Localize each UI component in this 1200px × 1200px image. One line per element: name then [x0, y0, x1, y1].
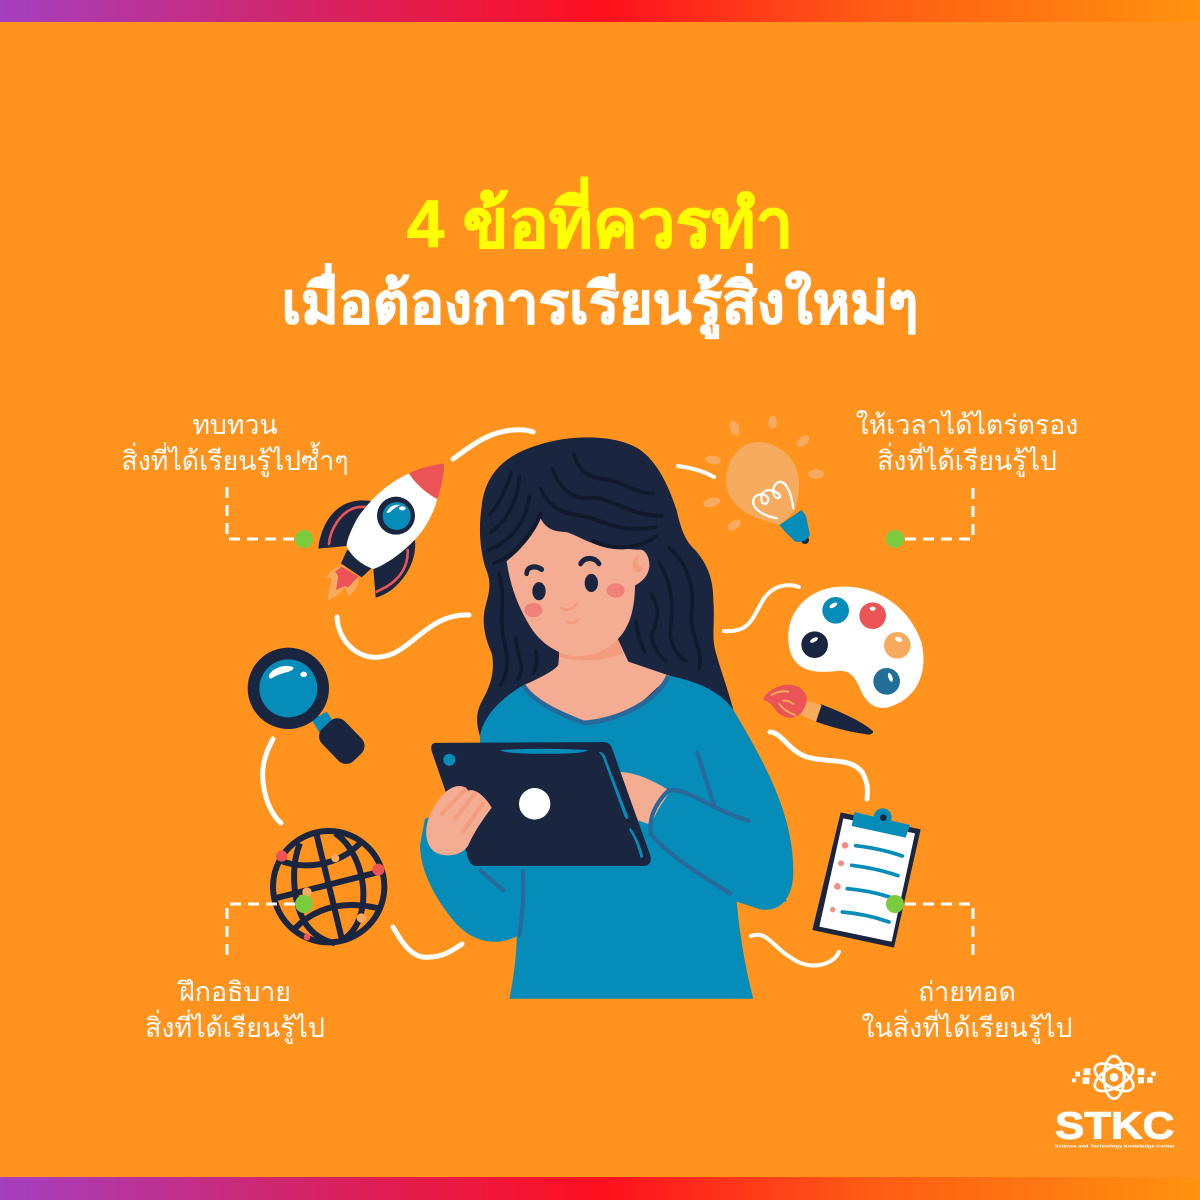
label: review repeatedly — [121, 410, 349, 477]
label: practise explaining — [145, 977, 325, 1044]
icon: rocket — [318, 463, 444, 601]
hair strands — [488, 455, 700, 685]
hair — [477, 437, 733, 759]
connector: bottom right — [905, 904, 973, 958]
top gradient bar — [0, 0, 1200, 22]
eyes — [532, 582, 546, 600]
title: เมื่อต้องการเรียนรู้สิ่งใหม่ๆ — [282, 263, 918, 339]
label: pass on: ในสิ่งที่ได้เรียนรู้ไป — [862, 1009, 1072, 1044]
face — [507, 519, 649, 656]
title — [282, 176, 918, 339]
icon: paint palette — [788, 587, 923, 708]
label: practise explaining: ฝึกอธิบาย — [177, 977, 291, 1007]
label: review repeatedly: สิ่งที่ได้เรียนรู้ไปซ้ำๆ — [121, 442, 349, 477]
icon: globe — [273, 831, 384, 943]
illustration: woman with tablet — [420, 437, 793, 999]
tablet details — [443, 754, 455, 766]
icon: paint brush — [763, 685, 873, 735]
label: practise explaining: สิ่งที่ได้เรียนรู้ไป — [145, 1009, 325, 1044]
neckline — [523, 676, 668, 723]
logo: STKC: STKC — [1055, 1105, 1174, 1147]
label: pass on: ถ่ายทอด — [918, 977, 1016, 1007]
ear detail — [633, 555, 643, 572]
neck and chest — [523, 636, 670, 723]
icon: light bulb — [702, 416, 824, 544]
connector: top left — [227, 487, 295, 539]
shirt — [420, 676, 793, 999]
logo: STKC — [1055, 1056, 1175, 1150]
motion swooshes — [263, 430, 867, 965]
label: pass on — [862, 977, 1072, 1044]
neck shadow — [559, 638, 623, 660]
title: 4 ข้อที่ควรทำ — [407, 176, 793, 262]
icon: magnifying glass — [248, 648, 369, 768]
icon: clipboard — [812, 808, 921, 948]
eyebrows — [527, 559, 599, 574]
nose and mouth — [562, 604, 578, 623]
label: time to reflect: ให้เวลาได้ไตร่ตรอง — [856, 409, 1078, 440]
bottom gradient bar — [0, 1177, 1200, 1200]
connector: top right — [905, 487, 973, 539]
label: time to reflect — [856, 409, 1078, 477]
logo: STKC: Science and Technology Knowledge Center — [1055, 1144, 1175, 1150]
tablet — [431, 742, 651, 866]
forearm skin — [620, 772, 670, 825]
cheeks — [524, 603, 542, 617]
label: review repeatedly: ทบทวน — [192, 410, 278, 440]
connector: bottom left — [227, 904, 295, 958]
hand — [426, 786, 492, 855]
finger lines — [442, 790, 483, 832]
sleeve — [653, 791, 787, 902]
green connector dots — [295, 530, 904, 913]
sleeve lines — [481, 753, 748, 935]
label: time to reflect: สิ่งที่ได้เรียนรู้ไป — [877, 442, 1057, 477]
